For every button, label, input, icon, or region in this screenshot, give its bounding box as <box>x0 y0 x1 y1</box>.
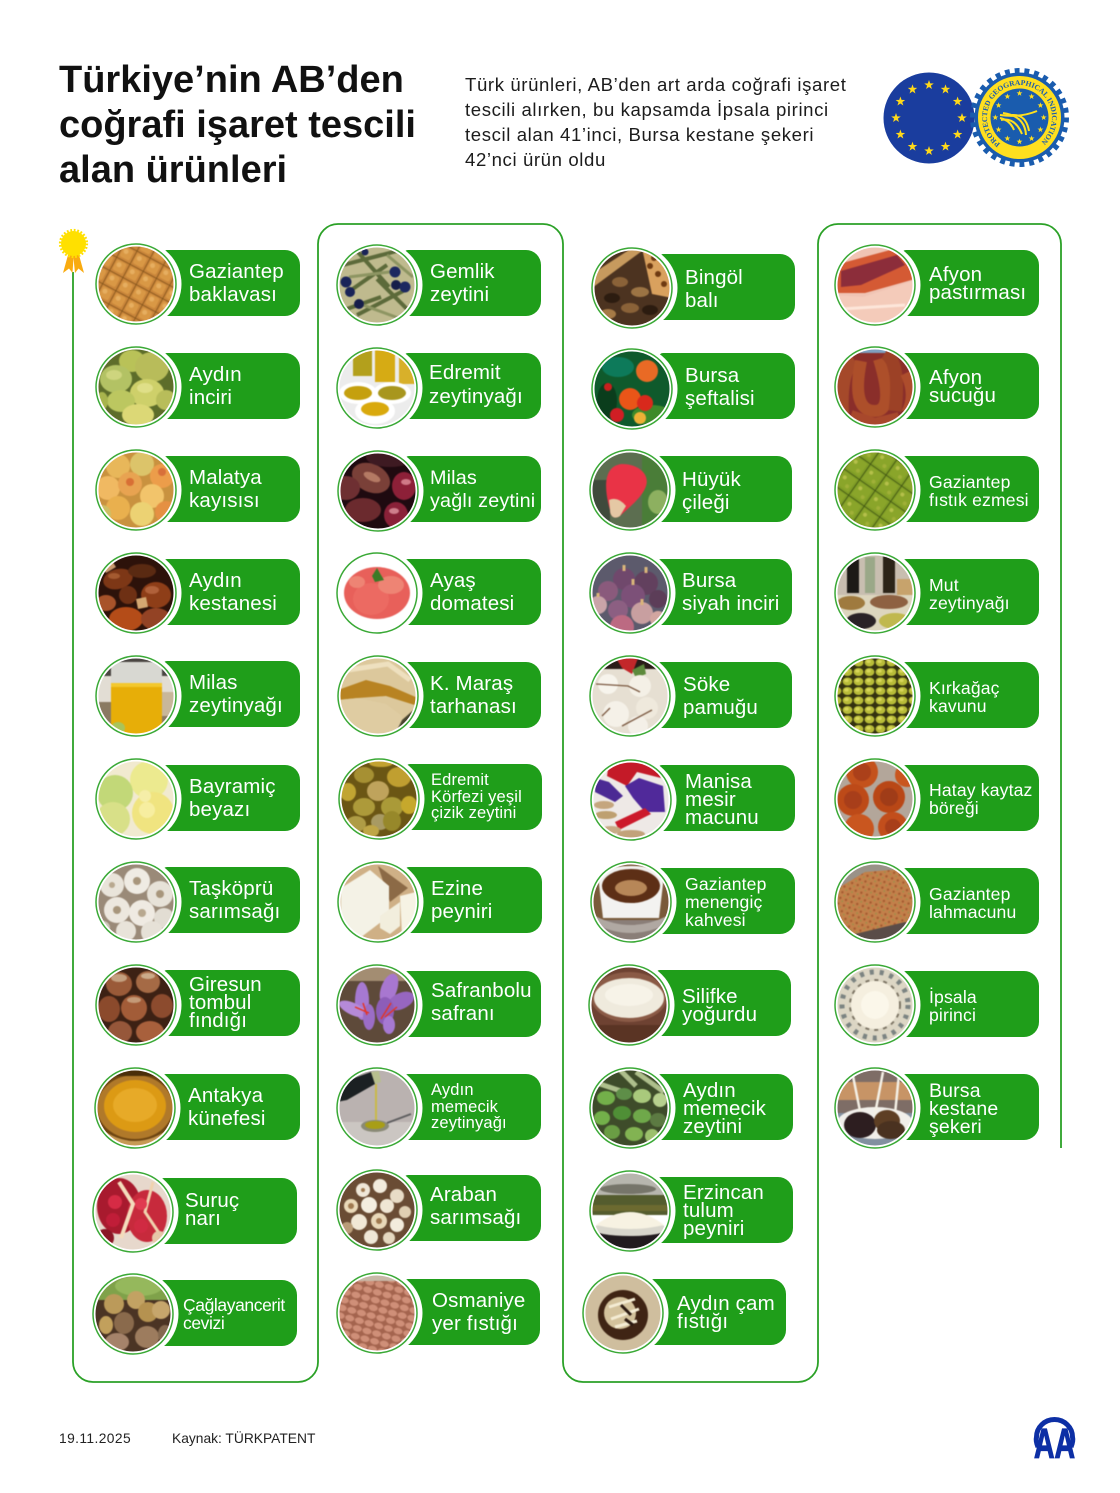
label: Gemlik zeytini: Gemlik <box>430 260 495 283</box>
photo: tulum cheese on plate <box>589 1170 676 1252</box>
label: Bursa şeftalisi <box>659 353 795 419</box>
label: Ezine peyniri: peyniri <box>431 900 492 923</box>
label: Erzincan tulum peyniri: peyniri <box>683 1217 744 1240</box>
icon: EU flag <box>884 72 974 164</box>
label: Aydın inciri: Aydın <box>189 363 242 386</box>
photo: rice on plate <box>830 960 920 1050</box>
photo: peanuts <box>336 1272 422 1354</box>
label: Kırkağaç kavunu: kavunu <box>929 696 987 716</box>
label: Bingöl balı <box>659 254 795 320</box>
label: Bursa kestane şekeri <box>902 1074 1039 1140</box>
label: Ayaş domatesi: domatesi <box>430 592 514 615</box>
label: Hüyük çileği: Hüyük <box>682 468 741 491</box>
photo: kaytaz pastries <box>830 754 920 844</box>
title: coğrafi işaret tescili <box>59 104 416 146</box>
item: K. Maraş tarhanası <box>337 655 541 737</box>
item: Söke pamuğu <box>589 655 792 737</box>
label: Afyon sucuğu: sucuğu <box>929 384 996 407</box>
label: K. Maraş tarhanası: tarhanası <box>430 695 517 718</box>
label: Suruç narı: narı <box>185 1207 221 1230</box>
photo: olive oil bottle and spoon <box>336 1067 422 1149</box>
label: Erzincan tulum peyniri: tulum <box>683 1199 734 1222</box>
photo: garlic <box>95 861 182 943</box>
label: Gemlik zeytini <box>404 250 541 316</box>
label: Milas zeytinyağı <box>163 661 300 727</box>
photo: peach tree <box>591 348 678 430</box>
item: Erzincan tulum peyniri <box>589 1170 793 1252</box>
label: Ayaş domatesi: Ayaş <box>430 569 476 592</box>
label: Osmaniye yer fıstığı <box>404 1279 540 1345</box>
photo: saffron crocus <box>336 964 422 1046</box>
item: Ayaş domatesi <box>336 552 541 634</box>
label: Taşköprü sarımsağı <box>163 867 300 933</box>
item: Hüyük çileği <box>589 449 792 531</box>
label: Ezine peyniri: Ezine <box>431 877 483 900</box>
label: Giresun tombul fındığı: tombul <box>189 991 251 1014</box>
title: Türkiye’nin AB’den <box>59 59 404 101</box>
label: Antakya künefesi: künefesi <box>188 1107 266 1130</box>
label: Manisa mesir macunu: macunu <box>685 806 759 829</box>
photo: strawberry <box>589 449 676 531</box>
photo: purple figs <box>589 552 676 634</box>
item: Silifke yoğurdu <box>588 964 791 1046</box>
title <box>59 59 416 191</box>
photo: mesir candies <box>590 759 676 841</box>
label: Ezine peyniri <box>405 867 542 933</box>
label: Bursa kestane şekeri: kestane <box>929 1098 998 1120</box>
label: Aydın memecik zeytinyağı <box>404 1074 541 1140</box>
item: Aydın inciri <box>95 346 300 428</box>
label: Edremit Körfezi yeşil çizik zeytini: Edremit <box>431 771 489 789</box>
label: Antakya künefesi: Antakya <box>188 1084 263 1107</box>
photo: candied chestnuts on sticks <box>830 1063 920 1153</box>
label: Suruç narı: Suruç <box>185 1189 239 1212</box>
label: Gaziantep baklavası: Gaziantep <box>189 260 284 283</box>
label: Silifke yoğurdu <box>656 970 791 1036</box>
photo: bees and honeycomb <box>591 247 678 329</box>
label: Bingöl balı: Bingöl <box>685 266 743 289</box>
item: Bursa siyah inciri <box>589 552 792 634</box>
label: Bayramiç beyazı: beyazı <box>189 798 250 821</box>
label: Safranbolu safranı <box>404 971 541 1037</box>
photo: market stall <box>834 552 920 634</box>
photo: pastrami <box>834 244 920 326</box>
item: Malatya kayısısı <box>95 449 300 531</box>
label: İpsala pirinci <box>902 971 1039 1037</box>
label: Söke pamuğu <box>657 662 792 728</box>
photo: tarhana <box>337 655 424 737</box>
label: Aydın memecik zeytini: memecik <box>683 1097 766 1120</box>
label: Hatay kaytaz böreği: böreği <box>929 798 979 818</box>
icon: PGI seal: PROTECTED GEOGRAPHICAL INDICATION <box>982 80 1057 148</box>
label: Aydın inciri <box>163 353 300 419</box>
label: Mut zeytinyağı: Mut <box>929 575 959 595</box>
title: alan ürünleri <box>59 149 287 191</box>
label: Bursa kestane şekeri: şekeri <box>929 1116 982 1138</box>
label: Söke pamuğu: pamuğu <box>683 696 758 719</box>
photo: white peaches <box>95 758 182 840</box>
item: Bursa kestane şekeri <box>830 1063 1039 1153</box>
label: Aydın inciri: inciri <box>189 386 232 409</box>
label: Milas zeytinyağı: zeytinyağı <box>189 694 283 717</box>
item: Osmaniye yer fıstığı <box>336 1272 540 1354</box>
label: Edremit zeytinyağı: zeytinyağı <box>429 385 523 408</box>
item: Gaziantep baklavası <box>95 243 300 325</box>
label: Bursa siyah inciri: siyah inciri <box>682 592 780 615</box>
photo: purple olives <box>337 450 424 532</box>
label: Hatay kaytaz böreği: Hatay kaytaz <box>929 780 1032 800</box>
label: Giresun tombul fındığı: Giresun <box>189 973 262 996</box>
item: Ezine peyniri <box>337 861 542 943</box>
label: K. Maraş tarhanası: K. Maraş <box>430 672 513 695</box>
photo: hanging melons <box>830 651 920 741</box>
label: Safranbolu safranı: safranı <box>431 1002 495 1025</box>
item: Gemlik zeytini <box>336 244 541 326</box>
label: Gaziantep baklavası <box>163 250 300 316</box>
label: Bursa kestane şekeri: Bursa <box>929 1080 981 1102</box>
label: Giresun tombul fındığı <box>163 970 300 1036</box>
footer: date: 19.11.2025 <box>59 1431 131 1446</box>
label: Taşköprü sarımsağı: sarımsağı <box>189 900 280 923</box>
item: Giresun tombul fındığı <box>95 964 300 1046</box>
photo: cotton <box>589 655 676 737</box>
item: Aydın kestanesi <box>95 552 300 634</box>
photo: white cheese <box>337 861 424 943</box>
label: Manisa mesir macunu: Manisa <box>685 770 752 793</box>
label: Bursa şeftalisi: Bursa <box>685 364 739 387</box>
label: Gaziantep lahmacunu: Gaziantep <box>929 884 1011 904</box>
label: Araban sarımsağı: Araban <box>430 1183 497 1206</box>
photo: pine nuts <box>582 1272 668 1354</box>
item: Çağlayancerit cevizi <box>92 1273 297 1355</box>
item: Bingöl balı <box>591 247 795 329</box>
item: Bursa şeftalisi <box>591 348 795 430</box>
photo: apricots <box>95 449 182 531</box>
item: Safranbolu safranı <box>336 964 541 1046</box>
label: Bursa şeftalisi: şeftalisi <box>685 387 755 410</box>
photo: walnuts <box>92 1273 178 1355</box>
photo: baklava <box>95 243 182 325</box>
label: Aydın çam fıstığı <box>650 1279 786 1345</box>
label: Aydın memecik zeytinyağı: zeytinyağı <box>431 1114 507 1132</box>
item: Araban sarımsağı <box>336 1169 541 1251</box>
photo: green figs <box>95 346 182 428</box>
label: Taşköprü sarımsağı: Taşköprü <box>189 877 273 900</box>
label: Erzincan tulum peyniri <box>657 1177 793 1243</box>
photo: green olives on tree <box>589 1067 676 1149</box>
label: Gaziantep fıstık ezmesi: fıstık ezmesi <box>929 490 1029 510</box>
label: Edremit zeytinyağı: Edremit <box>429 361 501 384</box>
photo: green olives <box>338 758 424 840</box>
label: Mut zeytinyağı: zeytinyağı <box>929 593 1010 613</box>
label: Antakya künefesi <box>162 1074 300 1140</box>
label: Bursa siyah inciri <box>657 559 792 625</box>
label: Osmaniye yer fıstığı: yer fıstığı <box>432 1312 518 1335</box>
label: Gemlik zeytini: zeytini <box>430 283 489 306</box>
label: Gaziantep lahmacunu <box>902 868 1039 934</box>
label: Gaziantep fıstık ezmesi <box>902 456 1039 522</box>
item: Manisa mesir macunu <box>590 759 795 841</box>
item: Edremit Körfezi yeşil çizik zeytini <box>338 758 542 840</box>
item: Hatay kaytaz böreği <box>830 754 1039 844</box>
label: İpsala pirinci: İpsala <box>929 987 977 1007</box>
intro text: tescil alan 41’inci, Bursa kestane şekeri <box>465 124 814 145</box>
label: Manisa mesir macunu: mesir <box>685 788 736 811</box>
label: Aydın memecik zeytinyağı: memecik <box>431 1098 498 1116</box>
label: Afyon sucuğu <box>902 353 1039 419</box>
label: Araban sarımsağı <box>404 1175 541 1241</box>
label: Gaziantep fıstık ezmesi: Gaziantep <box>929 472 1011 492</box>
photo: pistachio paste <box>834 449 920 531</box>
icon: PGI seal <box>970 68 1069 167</box>
label: Malatya kayısısı: Malatya <box>189 466 262 489</box>
item: Milas yağlı zeytini <box>337 450 541 532</box>
intro text: tescili alırken, bu kapsamda İpsala pirinci <box>465 99 829 120</box>
item: Gaziantep menengiç kahvesi <box>590 861 795 943</box>
label: Edremit Körfezi yeşil çizik zeytini: çizik zeytini <box>431 804 516 822</box>
label: Malatya kayısısı <box>163 456 300 522</box>
label: Aydın kestanesi: kestanesi <box>189 592 277 615</box>
intro text: Türk ürünleri, AB’den art arda coğrafi işaret <box>465 74 846 95</box>
footer: source: Kaynak: TÜRKPATENT <box>172 1431 315 1446</box>
label: Silifke yoğurdu: yoğurdu <box>682 1003 757 1026</box>
label: Mut zeytinyağı <box>902 559 1039 625</box>
label: Hüyük çileği: çileği <box>682 491 730 514</box>
photo: lahmacun <box>830 857 920 947</box>
label: Ayaş domatesi <box>404 559 541 625</box>
label: Silifke yoğurdu: Silifke <box>682 985 738 1008</box>
photo: araban garlic <box>336 1169 422 1251</box>
label: Hüyük çileği <box>657 456 792 522</box>
label: Afyon pastırması: Afyon <box>929 263 982 286</box>
label: Bursa siyah inciri: Bursa <box>682 569 736 592</box>
item: Aydın memecik zeytinyağı <box>336 1067 541 1149</box>
label: Erzincan tulum peyniri: Erzincan <box>683 1181 764 1204</box>
label: Milas yağlı zeytini <box>405 456 541 522</box>
label: Araban sarımsağı: sarımsağı <box>430 1206 521 1229</box>
label: Afyon pastırması <box>902 250 1039 316</box>
photo: olive oil glasses and bowls <box>336 347 422 429</box>
photo: hazelnuts <box>95 964 182 1046</box>
label: Bayramiç beyazı: Bayramiç <box>189 775 276 798</box>
label: Milas zeytinyağı: Milas <box>189 671 238 694</box>
item: Suruç narı <box>92 1171 297 1253</box>
label: Aydın memecik zeytinyağı: Aydın <box>431 1081 474 1099</box>
item: Aydın çam fıstığı <box>582 1272 786 1354</box>
label: Malatya kayısısı: kayısısı <box>189 489 260 512</box>
photo: kunefe <box>94 1067 180 1149</box>
label: Safranbolu safranı: Safranbolu <box>431 979 532 1002</box>
item: Antakya künefesi <box>94 1067 300 1149</box>
label: Kırkağaç kavunu <box>902 662 1039 728</box>
label: İpsala pirinci: pirinci <box>929 1005 976 1025</box>
label: Gaziantep menengiç kahvesi: kahvesi <box>685 910 746 930</box>
label: Afyon pastırması: pastırması <box>929 281 1026 304</box>
label: Milas yağlı zeytini: Milas <box>430 467 477 489</box>
photo: black olives on branch <box>336 244 422 326</box>
item: Milas zeytinyağı <box>95 655 300 737</box>
label: Edremit zeytinyağı <box>404 353 541 419</box>
photo: tomato <box>336 552 422 634</box>
label: Çağlayancerit cevizi <box>160 1280 297 1346</box>
label: Osmaniye yer fıstığı: Osmaniye <box>432 1289 525 1312</box>
item: Edremit zeytinyağı <box>336 347 541 429</box>
item: Aydın memecik zeytini <box>589 1067 793 1149</box>
label: Aydın çam fıstığı: Aydın çam <box>677 1292 775 1315</box>
photo: yogurt bowl <box>588 964 674 1046</box>
label: Edremit Körfezi yeşil çizik zeytini <box>406 764 542 830</box>
icon: gold rosette <box>58 228 88 273</box>
label: Aydın kestanesi: Aydın <box>189 569 242 592</box>
photo: sucuk <box>834 346 920 428</box>
item: İpsala pirinci <box>830 960 1039 1050</box>
photo: chestnuts <box>95 552 182 634</box>
label: Bingöl balı: balı <box>685 289 719 312</box>
label: Edremit Körfezi yeşil çizik zeytini: Körfezi yeşil <box>431 788 522 806</box>
label: Söke pamuğu: Söke <box>683 673 730 696</box>
label: Aydın çam fıstığı: fıstığı <box>677 1310 728 1333</box>
intro text <box>465 74 846 170</box>
label: Çağlayancerit cevizi: Çağlayancerit <box>183 1295 285 1315</box>
label: Aydın kestanesi <box>163 559 300 625</box>
item: Gaziantep fıstık ezmesi <box>834 449 1039 531</box>
label: Aydın memecik zeytini: Aydın <box>683 1079 736 1102</box>
label: Gaziantep menengiç kahvesi: Gaziantep <box>685 874 767 894</box>
photo: olive oil glass <box>95 655 182 737</box>
label: Gaziantep menengiç kahvesi <box>658 868 795 934</box>
label: Afyon sucuğu: Afyon <box>929 366 982 389</box>
label: Giresun tombul fındığı: fındığı <box>189 1009 247 1032</box>
label: Suruç narı <box>160 1178 297 1244</box>
photo: pomegranate <box>92 1171 178 1253</box>
label: Çağlayancerit cevizi: cevizi <box>183 1313 224 1333</box>
label: Gaziantep menengiç kahvesi: menengiç <box>685 892 762 912</box>
label: Milas yağlı zeytini: yağlı zeytini <box>430 490 535 512</box>
icon: EU flag and protected geographical indication seal <box>884 68 1069 167</box>
label: Aydın memecik zeytini: zeytini <box>683 1115 742 1138</box>
label: K. Maraş tarhanası <box>405 662 541 728</box>
photo: menengic coffee cup <box>590 861 676 943</box>
intro text: 42’nci ürün oldu <box>465 149 606 170</box>
label: Hatay kaytaz böreği <box>902 765 1039 831</box>
label: Kırkağaç kavunu: Kırkağaç <box>929 678 1000 698</box>
item: Kırkağaç kavunu <box>834 655 1039 737</box>
label: Manisa mesir macunu <box>658 765 795 831</box>
label: Aydın memecik zeytini <box>657 1074 793 1140</box>
item: Taşköprü sarımsağı <box>95 861 300 943</box>
item: Mut zeytinyağı <box>834 552 1039 634</box>
item: Bayramiç beyazı <box>95 758 300 840</box>
item: Afyon pastırması <box>834 244 1039 326</box>
item: Gaziantep lahmacunu <box>830 857 1039 947</box>
label: Gaziantep baklavası: baklavası <box>189 283 277 306</box>
label: Bayramiç beyazı <box>163 765 300 831</box>
item: Afyon sucuğu <box>834 346 1039 428</box>
label: Gaziantep lahmacunu: lahmacunu <box>929 902 1016 922</box>
